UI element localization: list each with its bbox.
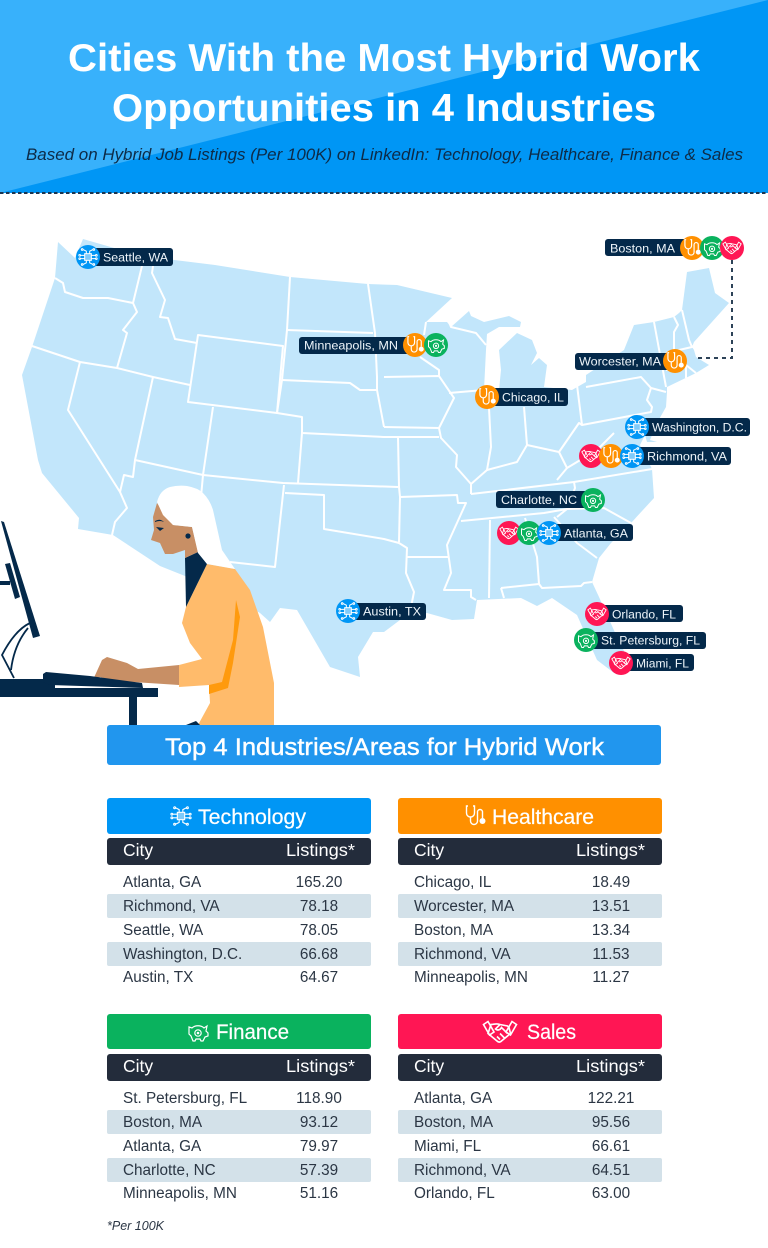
label: Atlanta: [497, 521, 633, 545]
table rows: 57.39: [300, 1162, 338, 1179]
subtitle: Based on Hybrid Job Listings (Per 100K) on LinkedIn: Technology, Healthcare, Finance & Sales: [26, 146, 743, 164]
table rows: [107, 1090, 371, 1202]
title: Opportunities in 4 Industries: [112, 87, 656, 130]
table rows: Austin, TX: [123, 969, 193, 986]
table rows: 11.27: [592, 969, 630, 986]
table rows: Boston, MA: [123, 1114, 203, 1131]
heading: Finance: Finance: [216, 1021, 289, 1044]
header banner: [0, 0, 768, 193]
footnote: *Per 100K: [107, 1219, 165, 1233]
table rows: Worcester, MA: [414, 898, 515, 915]
title: Cities With the Most Hybrid Work: [68, 37, 701, 80]
table rows: 165.20: [296, 874, 342, 891]
table rows: 66.61: [592, 1138, 630, 1155]
table rows: St. Petersburg, FL: [123, 1090, 247, 1107]
table rows: 66.68: [300, 946, 338, 963]
label: Washington: [625, 415, 750, 439]
table rows: Atlanta, GA: [123, 1138, 202, 1155]
label: Seattle: Seattle, WA: [103, 250, 169, 264]
table rows: 11.53: [592, 946, 630, 963]
heading: Technology: Technology: [198, 806, 306, 829]
table header: City: [414, 840, 444, 860]
table rows: Richmond, VA: [123, 898, 220, 915]
label: Atlanta: Atlanta, GA: [564, 526, 629, 540]
table rows: 18.49: [592, 874, 630, 891]
table rows: Atlanta, GA: [414, 1090, 493, 1107]
label: Minneapolis: [299, 333, 448, 357]
table rows: 93.12: [300, 1114, 338, 1131]
panel: Sales: [398, 1014, 662, 1202]
table rows: Charlotte, NC: [123, 1162, 216, 1179]
label: Worcester: Worcester, MA: [579, 354, 662, 368]
label: Miami: [609, 651, 694, 675]
table rows: 13.51: [592, 898, 630, 915]
face: [151, 503, 198, 558]
table rows: 13.34: [592, 922, 631, 939]
label: Richmond: Richmond, VA: [647, 450, 728, 464]
label: Worcester: [575, 349, 687, 373]
table header: Listings*: [576, 1056, 645, 1076]
table rows: [398, 874, 662, 986]
table header: City: [414, 1056, 444, 1076]
label: Boston: [605, 236, 744, 260]
panel: Healthcare: [398, 798, 662, 986]
label: St. Petersburg: [574, 628, 706, 652]
table rows: [107, 874, 371, 986]
table rows: Minneapolis, MN: [414, 969, 528, 986]
table rows: Chicago, IL: [414, 874, 491, 891]
table rows: Boston, MA: [414, 922, 494, 939]
label: Boston: Boston, MA: [610, 242, 676, 256]
keyboard and desk: [0, 672, 200, 725]
table rows: 63.00: [592, 1185, 630, 1202]
table header: Listings*: [576, 840, 645, 860]
label: Richmond: [579, 444, 731, 468]
label: Orlando: [585, 602, 683, 626]
US map: [22, 239, 729, 677]
table header: [107, 838, 371, 865]
turtleneck: [185, 552, 207, 607]
table rows: 122.21: [588, 1090, 634, 1107]
table header: City: [123, 840, 153, 860]
label: Washington: Washington, D.C.: [652, 420, 747, 434]
heading: Sales: Sales: [527, 1021, 576, 1044]
table rows: 64.67: [300, 969, 338, 986]
heading: Sales: [398, 1014, 662, 1049]
table rows: 95.56: [592, 1114, 630, 1131]
label: Austin: [336, 599, 426, 623]
heading: Healthcare: Healthcare: [492, 806, 594, 829]
eye and earring: [155, 520, 191, 539]
arm and hand: [92, 657, 179, 685]
label: Chicago: [475, 385, 568, 409]
table rows: Orlando, FL: [414, 1185, 495, 1202]
label: Austin: Austin, TX: [363, 604, 421, 618]
table rows: 51.16: [300, 1185, 338, 1202]
cardigan: [179, 564, 274, 725]
table header: Listings*: [286, 840, 355, 860]
table rows: 118.90: [296, 1090, 342, 1107]
connector: Boston to Worcester: [696, 260, 732, 358]
label: Seattle: [76, 245, 173, 269]
table rows: Atlanta, GA: [123, 874, 202, 891]
table rows: Miami, FL: [414, 1138, 481, 1155]
table rows: 78.05: [300, 922, 338, 939]
label: St. Petersburg: St. Petersburg, FL: [601, 634, 700, 648]
table header: City: [123, 1056, 153, 1076]
table rows: Seattle, WA: [123, 922, 204, 939]
panel: Finance: [107, 1014, 371, 1202]
table header: [398, 838, 662, 865]
label: Miami: Miami, FL: [636, 656, 689, 670]
cardigan shadow: [209, 600, 240, 694]
label: Charlotte: [496, 488, 605, 512]
table rows: Boston, MA: [414, 1114, 494, 1131]
table rows: Washington, D.C.: [123, 946, 242, 963]
panel: Technology: [107, 798, 371, 986]
table rows: Minneapolis, MN: [123, 1185, 237, 1202]
label: Charlotte: Charlotte, NC: [501, 493, 577, 507]
table rows: 79.97: [300, 1138, 338, 1155]
table header: Listings*: [286, 1056, 355, 1076]
table rows: Richmond, VA: [414, 946, 511, 963]
table rows: 78.18: [300, 898, 338, 915]
table rows: Richmond, VA: [414, 1162, 511, 1179]
table header: [107, 1054, 371, 1081]
heading: Finance: [107, 1014, 371, 1049]
table header: [398, 1054, 662, 1081]
table rows: [398, 1090, 662, 1202]
label: Chicago: Chicago, IL: [502, 390, 564, 404]
table rows: 64.51: [592, 1162, 630, 1179]
section heading: [107, 725, 661, 765]
heading: Healthcare: [398, 798, 662, 834]
label: Minneapolis: Minneapolis, MN: [304, 338, 398, 352]
section heading: Top 4 Industries/Areas for Hybrid Work: [165, 734, 605, 761]
illustration: woman at computer: [0, 486, 274, 725]
heading: Technology: [107, 798, 371, 834]
hair: [157, 486, 235, 569]
title: [68, 37, 701, 130]
label: Orlando: Orlando, FL: [612, 608, 676, 622]
monitor and stand: [0, 521, 40, 678]
